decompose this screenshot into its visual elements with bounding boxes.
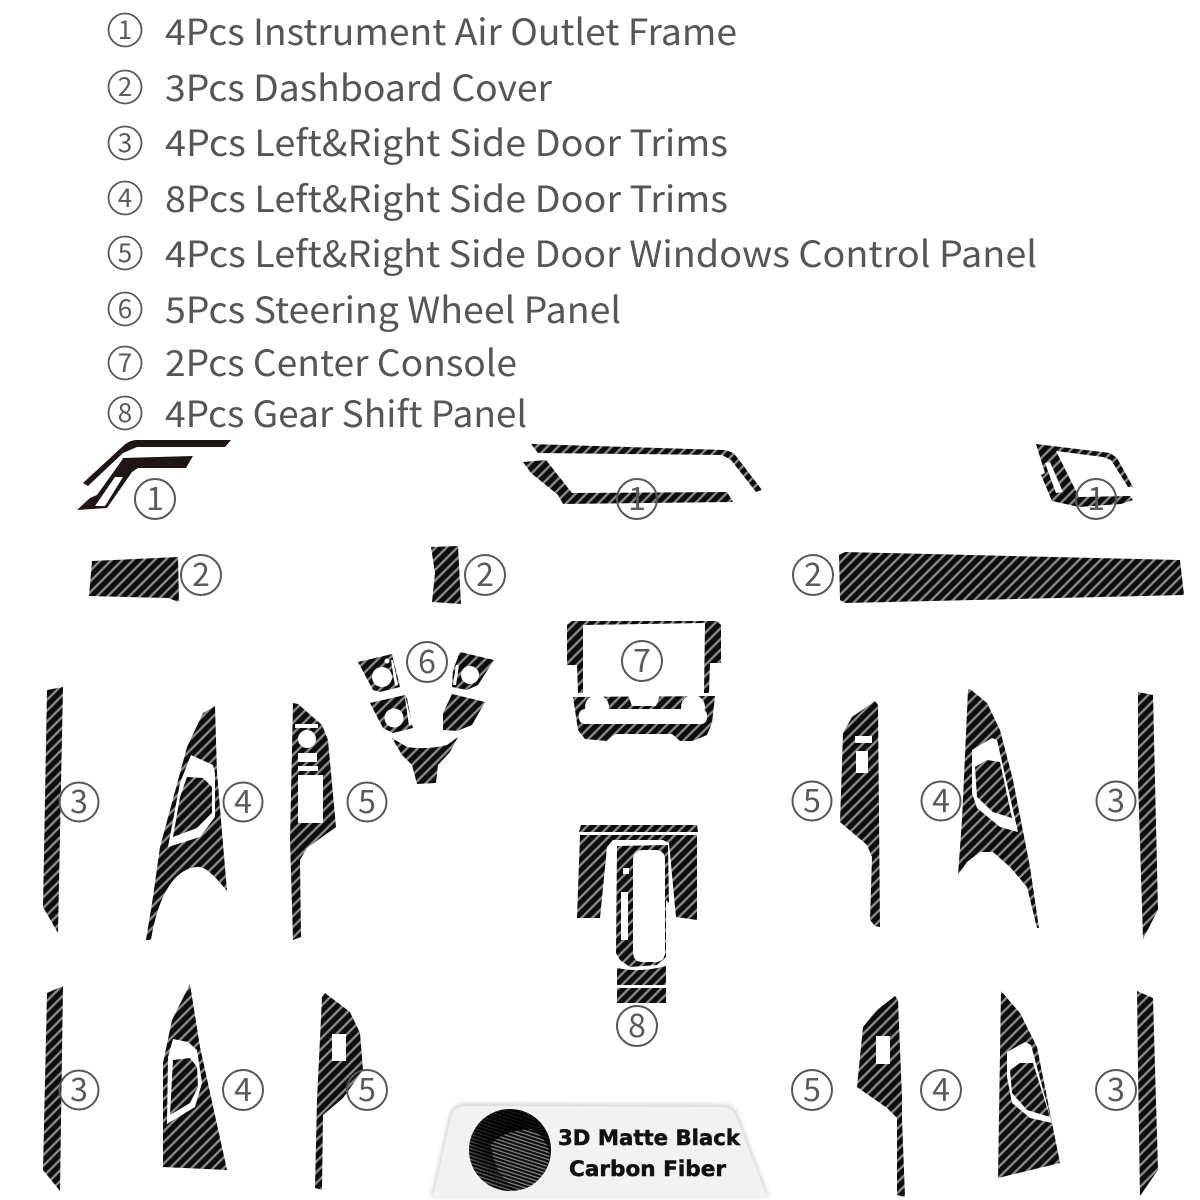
air outlet frame: left: 1 [146,474,164,520]
door trim: lower left: 3 [70,1065,88,1111]
door trim: lower right: 3 [1107,1065,1125,1111]
door panel: upper right: 4 [932,776,950,822]
door trim: upper right [1096,692,1158,939]
icon: carbon fiber ball [469,1109,551,1191]
door panel: lower left [163,984,263,1170]
dashboard cover: left: 2 [192,550,210,596]
air outlet frame: right: 1 [1087,474,1105,520]
list item 3: 4Pcs Left&Right Side Door Trims [165,115,728,167]
list item 1: 1 [118,10,132,47]
air outlet frame: center: 1 [628,474,646,520]
list item 7: 7 [118,343,132,380]
window control panel: lower right [792,996,905,1197]
window control panel: lower left [315,993,387,1190]
window control panel: upper left: 5 [358,777,376,823]
center console [567,621,721,741]
window control panel: upper right: 5 [803,776,821,822]
list item 6: 5Pcs Steering Wheel Panel [165,282,621,334]
dashboard cover: left [89,550,221,602]
list item 8: 4Pcs Gear Shift Panel [165,386,527,438]
door panel: upper right [922,689,1039,928]
list item 4: 8Pcs Left&Right Side Door Trims [165,171,728,223]
dashboard cover: right: 2 [804,550,822,596]
door panel: upper left: 4 [234,777,252,823]
list item 3: 3 [118,123,132,160]
list item 7: 2Pcs Center Console [165,335,517,387]
gear shift panel [577,825,698,1047]
list item 2: 2 [118,67,132,104]
list item 2: 3Pcs Dashboard Cover [165,60,553,112]
dashboard cover: center: 2 [476,550,494,596]
list item 5: 5 [118,233,132,270]
list item 1: 4Pcs Instrument Air Outlet Frame [165,4,737,56]
list item 6: 6 [118,289,132,326]
list item 5: 4Pcs Left&Right Side Door Windows Control Panel [165,226,1037,278]
door trim: upper left [43,687,98,933]
window control panel: lower left: 5 [358,1065,376,1111]
center console: 7 [633,636,651,682]
badge text: 3D Matte Black [558,1126,741,1150]
dashboard cover: right [793,550,1184,603]
door trim: lower left [43,986,98,1191]
parts list [108,4,1037,438]
material badge [431,1103,769,1197]
door panel: lower right: 4 [932,1065,950,1111]
steering wheel panel: 6 [418,637,436,683]
steering wheel panel [358,637,494,784]
door trim: upper right: 3 [1107,776,1125,822]
dashboard cover: center [431,546,505,604]
air outlet frame: center [523,444,762,520]
list item 8: 8 [118,393,132,430]
door trim: lower right [1096,991,1158,1196]
door trim: upper left: 3 [70,777,88,823]
window control panel: lower right: 5 [803,1065,821,1111]
badge text: Carbon Fiber [569,1157,727,1181]
gear shift panel: 8 [628,1001,646,1047]
window control panel: upper left [290,703,386,940]
door panel: upper left [146,706,262,940]
air outlet frame: right [1036,444,1133,520]
air outlet frame: left [77,440,231,520]
badge text [558,1126,741,1181]
window control panel: upper right [792,701,880,927]
list item 4: 4 [118,178,132,215]
door panel: lower right [921,991,1060,1178]
door panel: lower left: 4 [234,1065,252,1111]
